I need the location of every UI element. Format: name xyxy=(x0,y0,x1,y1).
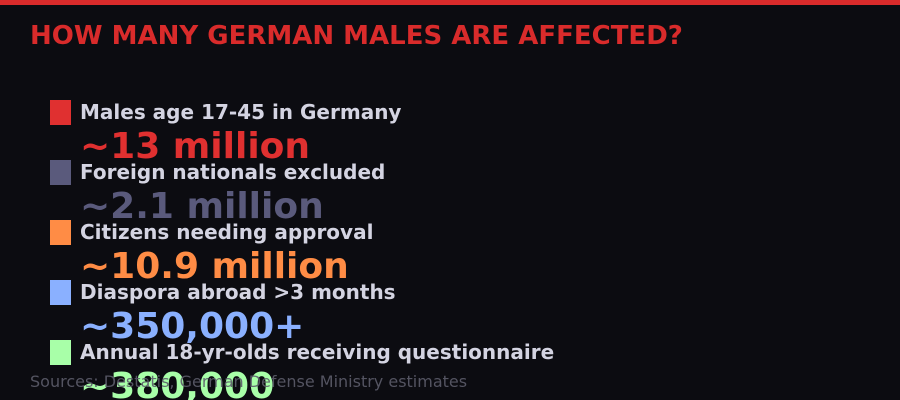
label: annual: Annual 18-yr-olds receiving questionnaire xyxy=(80,340,554,364)
icon: red square xyxy=(50,100,71,125)
title: HOW MANY GERMAN MALES ARE AFFECTED? xyxy=(30,21,683,51)
icon: blue square xyxy=(50,280,71,305)
value: 2.1 million: ~2.1 million xyxy=(80,186,324,227)
item: foreign nationals xyxy=(50,160,385,227)
icon: green square xyxy=(50,340,71,365)
label: citizens: Citizens needing approval xyxy=(80,220,373,244)
value: 10.9 million: ~10.9 million xyxy=(80,246,349,287)
icon: orange square xyxy=(50,220,71,245)
label: foreign: Foreign nationals excluded xyxy=(80,160,385,184)
label: diaspora: Diaspora abroad >3 months xyxy=(80,280,396,304)
item: 18-year-olds xyxy=(50,340,554,400)
value: 13 million: ~13 million xyxy=(80,126,310,167)
item: citizens xyxy=(50,220,373,287)
item: diaspora xyxy=(50,280,396,347)
sources: Sources: Destatis, German Defense Ministry estimates xyxy=(30,372,467,391)
item: males 17-45 xyxy=(50,100,401,167)
icon: gray square xyxy=(50,160,71,185)
label: males: Males age 17-45 in Germany xyxy=(80,100,401,124)
value: 350,000+: ~350,000+ xyxy=(80,306,304,347)
